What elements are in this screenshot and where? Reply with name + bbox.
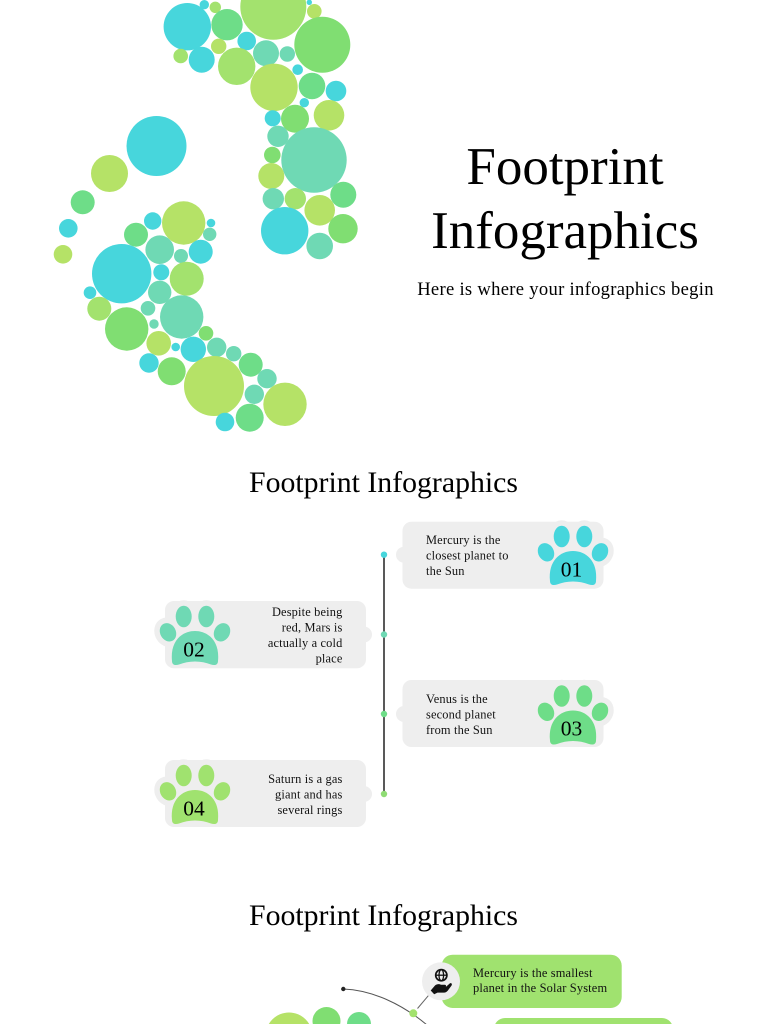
footprint: upper right foot of circles <box>164 0 358 259</box>
title <box>431 138 699 260</box>
card 04: Saturn: 04 <box>183 796 205 820</box>
card 01: Mercury: the Sun <box>426 564 465 578</box>
card 02: Mars <box>157 601 372 668</box>
card 02: Mars: Despite being <box>272 605 342 619</box>
card 04: Saturn: giant and has <box>275 788 343 802</box>
card 01: Mercury: closest planet to <box>426 548 509 562</box>
footprint: lower left foot of circles <box>84 201 307 432</box>
card 03: Venus: from the Sun <box>426 723 493 737</box>
card 02: Mars: place <box>316 652 343 666</box>
callout: Mercury smallest planet: Mercury is the smallest <box>473 966 593 980</box>
card 01: Mercury <box>396 522 611 589</box>
title: Infographics <box>431 202 699 260</box>
card 04: Saturn <box>157 760 372 827</box>
card 02: Mars: 02 <box>183 638 205 662</box>
heading: timeline section: Footprint Infographics <box>249 466 518 499</box>
card 03: Venus: 03 <box>561 716 582 740</box>
card 03: Venus: second planet <box>426 708 496 722</box>
card 04: Saturn: Saturn is a gas <box>268 772 343 786</box>
callout: Mercury smallest planet <box>442 955 622 1008</box>
timeline axis with dots <box>381 552 387 797</box>
card 03: Venus <box>396 680 611 747</box>
card 04: Saturn: several rings <box>277 803 343 817</box>
partial foot circles at bottom edge <box>266 1007 371 1024</box>
card 01: Mercury: Mercury is the <box>426 533 501 547</box>
title: Footprint <box>466 138 664 196</box>
curved connector line <box>341 987 428 1024</box>
callout: second green panel, cut off at page edge <box>494 1018 673 1024</box>
callout: Mercury smallest planet: planet in the Solar System <box>473 981 607 995</box>
card 02: Mars: red, Mars is <box>282 620 343 634</box>
footprint: trail of toe circles <box>54 116 187 264</box>
icon: globe in hand <box>422 962 460 1000</box>
card 01: Mercury: 01 <box>561 558 582 582</box>
card 03: Venus: Venus is the <box>426 692 488 706</box>
card 02: Mars: actually a cold <box>268 636 343 650</box>
heading: bottom section: Footprint Infographics <box>249 899 518 932</box>
subtitle: Here is where your infographics begin <box>417 279 714 300</box>
